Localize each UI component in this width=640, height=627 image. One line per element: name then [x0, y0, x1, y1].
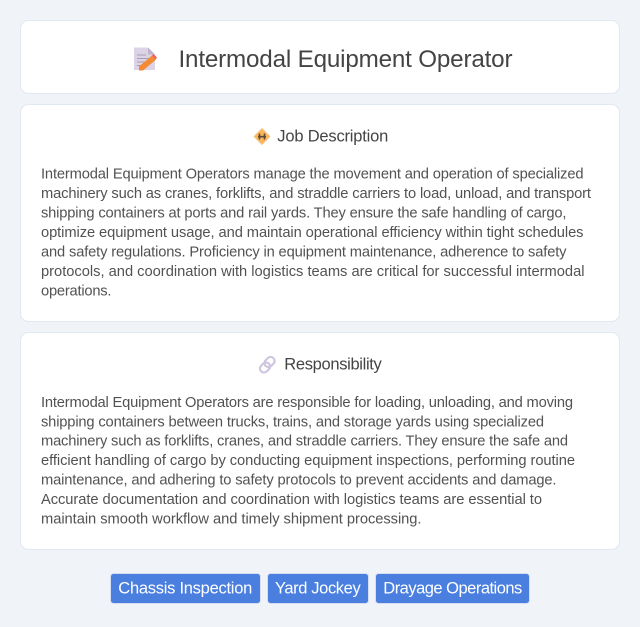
tag: yard jockey: Yard Jockey — [275, 580, 361, 598]
tag: drayage operations: Drayage Operations — [383, 580, 522, 598]
panel: responsibility — [20, 332, 620, 550]
text block: job description — [41, 166, 591, 299]
text block: job description: Intermodal Equipment Operators manage the movement and operation of specialized — [41, 166, 584, 182]
icon: chain link — [258, 355, 276, 374]
text block: job description: machinery such as cranes, forklifts, and straddle carriers to load, unload, and transport — [41, 186, 591, 202]
text block: responsibility: shipping containers between trucks, trains, and storage yards using specialized — [41, 414, 544, 430]
text block: responsibility: maintain smooth workflow and timely shipment processing. — [41, 512, 422, 528]
text block: job description: shipping containers at ports and rail yards. They ensure the safe handling of cargo, — [41, 205, 566, 221]
title: Intermodal Equipment Operator — [178, 46, 512, 73]
text block: responsibility: Intermodal Equipment Operators are responsible for loading, unloading, and moving — [41, 395, 573, 411]
skill tags — [110, 574, 530, 604]
text block: responsibility: maintenance, and adhering to safety protocols to prevent accidents and damage. — [41, 472, 556, 488]
text block: responsibility: Accurate documentation and coordination with logistics teams are essential to — [41, 492, 542, 508]
tag: chassis inspection — [110, 574, 260, 604]
panel: title card — [20, 20, 620, 94]
text block: job description: optimize equipment usage, and maintain operational efficiency within tight schedules — [41, 225, 584, 241]
icon: orange diamond sign — [254, 128, 270, 144]
text block: job description: operations. — [41, 283, 112, 299]
text block: job description: protocols, and coordination with logistics teams are critical for successful intermodal — [41, 264, 584, 280]
heading: job description: Job Description — [277, 128, 388, 146]
text block: responsibility: efficient handling of cargo by conducting equipment inspections, performing routine — [41, 453, 575, 469]
panel: job description — [20, 104, 620, 322]
heading: responsibility: Responsibility — [284, 356, 383, 374]
tag: yard jockey — [268, 574, 368, 604]
tag: drayage operations — [376, 574, 530, 604]
text block: responsibility: machinery such as forklifts, cranes, and straddle carriers. They ensure the safe and — [41, 434, 568, 450]
tag: chassis inspection: Chassis Inspection — [118, 580, 252, 598]
text block: responsibility — [41, 395, 575, 528]
icon: document with pencil — [134, 48, 157, 70]
text block: job description: and safety regulations. Proficiency in equipment maintenance, adherence to safety — [41, 244, 567, 260]
